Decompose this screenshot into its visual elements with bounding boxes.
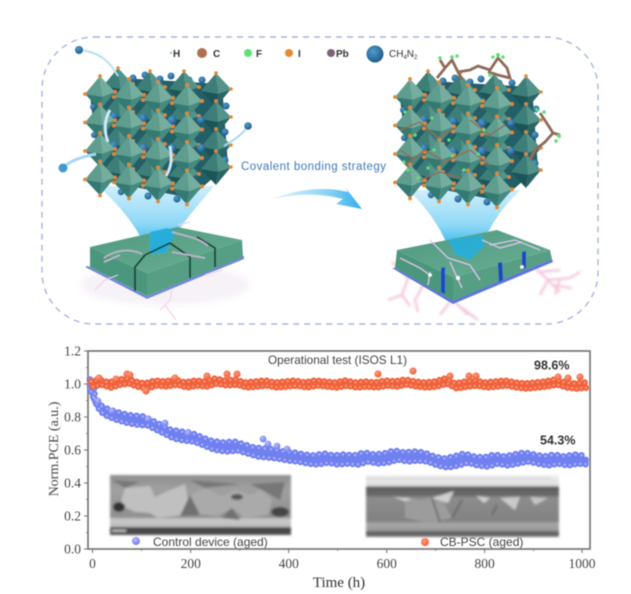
axes frame [84, 351, 590, 553]
legend: atoms: C [213, 49, 220, 60]
legend: control device: Control device (aged) [153, 535, 268, 549]
x axis labels: 400 [279, 556, 299, 571]
y axis labels: 0.2 [64, 508, 81, 524]
y axis labels: 0.8 [64, 410, 81, 424]
x axis labels [89, 556, 596, 571]
x axis labels: 800 [474, 556, 495, 571]
legend: CB-PSC: CB-PSC (aged) [440, 535, 523, 549]
legend: atoms: F [256, 49, 262, 60]
x axis labels: 600 [377, 556, 397, 571]
inset: CB-PSC SEM [366, 475, 559, 537]
y axis labels: 1.2 [64, 344, 81, 358]
left beam of light [98, 186, 214, 254]
chart: operational stability [47, 344, 596, 591]
value: control retention: 54.3% [540, 434, 575, 448]
y axis labels: 0.4 [64, 476, 81, 490]
right crystal with covalent molecules [393, 53, 561, 209]
series: CB-PSC [91, 367, 587, 395]
left perovskite crystal [83, 66, 233, 206]
legend: atoms: CH [389, 49, 403, 60]
y axis labels [64, 344, 81, 556]
right healed film [392, 230, 553, 304]
x axis labels: 200 [181, 556, 201, 571]
chart title: Operational test (ISOS L1) [268, 353, 407, 367]
legend: atoms: N [407, 49, 414, 60]
label: covalent bonding strategy: Covalent bonding strategy [241, 161, 386, 173]
arrow [270, 187, 362, 209]
legend: atoms: Pb [336, 49, 349, 60]
legend: atoms: 4 [403, 55, 407, 61]
value: CB-PSC retention: 98.6% [534, 358, 569, 372]
legend: atoms [170, 46, 418, 62]
legend: atoms: 2 [414, 55, 418, 61]
right beam of light [408, 190, 520, 254]
x axis labels: 1000 [568, 556, 596, 571]
right dendrites [388, 262, 580, 320]
left migrating ions [58, 46, 252, 176]
panel border [42, 37, 598, 324]
legend: atoms: I [298, 49, 301, 60]
left dendrite traces [95, 222, 222, 320]
panel: covalent bonding schematic [42, 37, 598, 324]
y axis labels: 0.6 [64, 442, 81, 458]
y axis title: Norm.PCE (a.u.) [47, 401, 62, 496]
x axis labels: 0 [89, 556, 96, 571]
inset: control device SEM [110, 475, 291, 535]
series: control device [90, 380, 588, 468]
y axis labels: 1.0 [64, 376, 81, 392]
left cracked film [80, 227, 250, 305]
legend: atoms: H [173, 49, 180, 60]
y axis labels: 0.0 [64, 542, 81, 556]
x axis title: Time (h) [313, 575, 365, 591]
